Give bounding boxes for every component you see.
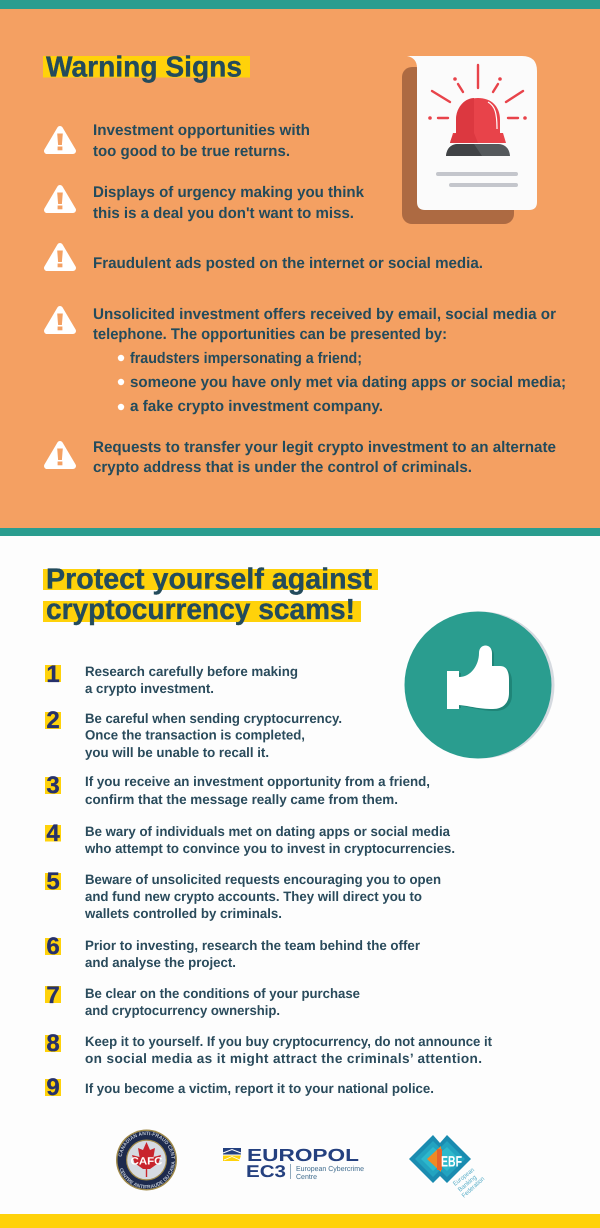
warning item 2	[47, 184, 364, 222]
warning item 5: Requests to transfer your legit crypto investment to an alternate	[93, 439, 556, 456]
logo: EBF European Banking Federation: EBF	[441, 1154, 462, 1170]
list item 2	[45, 707, 342, 760]
logo: Europol EC3	[223, 1145, 364, 1181]
logo: EBF European Banking Federation: Federation	[461, 1175, 486, 1199]
logo: EBF European Banking Federation	[409, 1135, 486, 1199]
warning item 4: fraudsters impersonating a friend;	[130, 350, 362, 367]
list item 3: If you receive an investment opportunity from a friend,	[85, 774, 430, 789]
logo: Europol EC3: EUROPOL	[247, 1145, 359, 1165]
warning item 1: Investment opportunities with	[93, 122, 310, 139]
list item 3: confirm that the message really came from them.	[85, 792, 398, 807]
number 6: 6	[46, 933, 60, 960]
footer bar	[0, 1214, 600, 1228]
icon: warning triangle 4	[47, 309, 73, 331]
warning item 5: crypto address that is under the control of criminals.	[93, 459, 472, 476]
list item 6	[45, 933, 421, 970]
warning item 3: Fraudulent ads posted on the internet or social media.	[93, 255, 483, 272]
logo: Europol EC3: Centre	[296, 1172, 317, 1181]
list item 5: wallets controlled by criminals.	[84, 906, 282, 921]
list item 9	[45, 1074, 434, 1101]
logo: EBF European Banking Federation: European	[452, 1166, 476, 1188]
heading: Warning Signs: Warning Signs	[46, 52, 242, 84]
logo: EBF European Banking Federation: Banking	[457, 1174, 478, 1194]
list item 4: Be wary of individuals met on dating apps or social media	[85, 824, 450, 839]
heading: Protect yourself against cryptocurrency scams: Protect yourself against	[46, 564, 372, 596]
list item 1: a crypto investment.	[85, 681, 214, 696]
logo: Europol EC3: EC3	[246, 1162, 286, 1181]
list item 6: Prior to investing, research the team behind the offer	[85, 938, 421, 953]
number 4: 4	[46, 820, 60, 847]
panel: warning signs background	[0, 0, 600, 536]
icon: alarm siren on document	[402, 56, 537, 224]
warning item 3	[47, 246, 483, 272]
logo: CAFC seal: CENTRE ANTIFRAUDE DU CANADA	[120, 1162, 175, 1188]
list item 4	[45, 820, 455, 856]
logo: CAFC seal: CANADIAN ANTI-FRAUD CENTRE	[118, 1132, 175, 1159]
logo: Europol EC3: European Cybercrime	[296, 1164, 364, 1173]
list item 5: and fund new crypto accounts. They will direct you to	[85, 889, 422, 904]
list item 2: Be careful when sending cryptocurrency.	[85, 711, 342, 726]
warning item 1: too good to be true returns.	[93, 143, 290, 160]
icon: warning triangle 1	[47, 129, 73, 151]
heading: Protect yourself against cryptocurrency scams: cryptocurrency scams!	[46, 594, 355, 626]
list item 4: who attempt to convince you to invest in cryptocurrencies.	[84, 841, 455, 856]
number 5: 5	[46, 868, 60, 895]
list item 8: Keep it to yourself. If you buy cryptocurrency, do not announce it	[85, 1034, 492, 1049]
icon: thumbs up in teal circle	[404, 612, 554, 758]
list item 1: Research carefully before making	[85, 664, 298, 679]
list item 1	[45, 661, 298, 696]
logo: CAFC seal	[116, 1130, 177, 1190]
heading: Protect yourself against cryptocurrency scams	[43, 564, 378, 626]
list item 7: Be clear on the conditions of your purchase	[85, 986, 360, 1001]
list item 7: and cryptocurrency ownership.	[85, 1003, 280, 1018]
list item 2: Once the transaction is completed,	[85, 728, 305, 742]
warning item 2: this is a deal you don't want to miss.	[93, 205, 354, 222]
list item 2: you will be unable to recall it.	[85, 745, 269, 760]
warning item 2: Displays of urgency making you think	[93, 184, 364, 201]
list item 5: Beware of unsolicited requests encouraging you to open	[85, 872, 441, 887]
warning item 5	[47, 439, 556, 476]
number 1: 1	[46, 661, 60, 688]
warning item 1	[47, 122, 310, 160]
list item 6: and analyse the project.	[85, 955, 236, 970]
number 7: 7	[46, 982, 60, 1009]
list item 9: If you become a victim, report it to your national police.	[85, 1081, 434, 1096]
logo: CAFC seal: CAFC	[130, 1156, 163, 1168]
number 3: 3	[46, 772, 60, 799]
list item 5	[45, 868, 441, 921]
icon: warning triangle 5	[47, 444, 73, 466]
icon: warning triangle 3	[47, 246, 73, 268]
warning item 4: a fake crypto investment company.	[130, 398, 383, 415]
warning item 4: telephone. The opportunities can be presented by:	[93, 326, 447, 343]
warning item 4: someone you have only met via dating apps or social media;	[130, 374, 566, 391]
number 2: 2	[46, 707, 60, 734]
warning item 4: Unsolicited investment offers received by email, social media or	[93, 306, 556, 323]
warning item 4	[47, 306, 566, 415]
list item 3	[45, 772, 430, 807]
number 8: 8	[46, 1030, 60, 1057]
icon: warning triangle 2	[47, 188, 73, 210]
list item 7	[45, 982, 360, 1018]
list item 8: on social media as it might attract the criminals’ attention.	[85, 1051, 482, 1066]
number 9: 9	[46, 1074, 60, 1101]
list item 8	[45, 1030, 492, 1066]
